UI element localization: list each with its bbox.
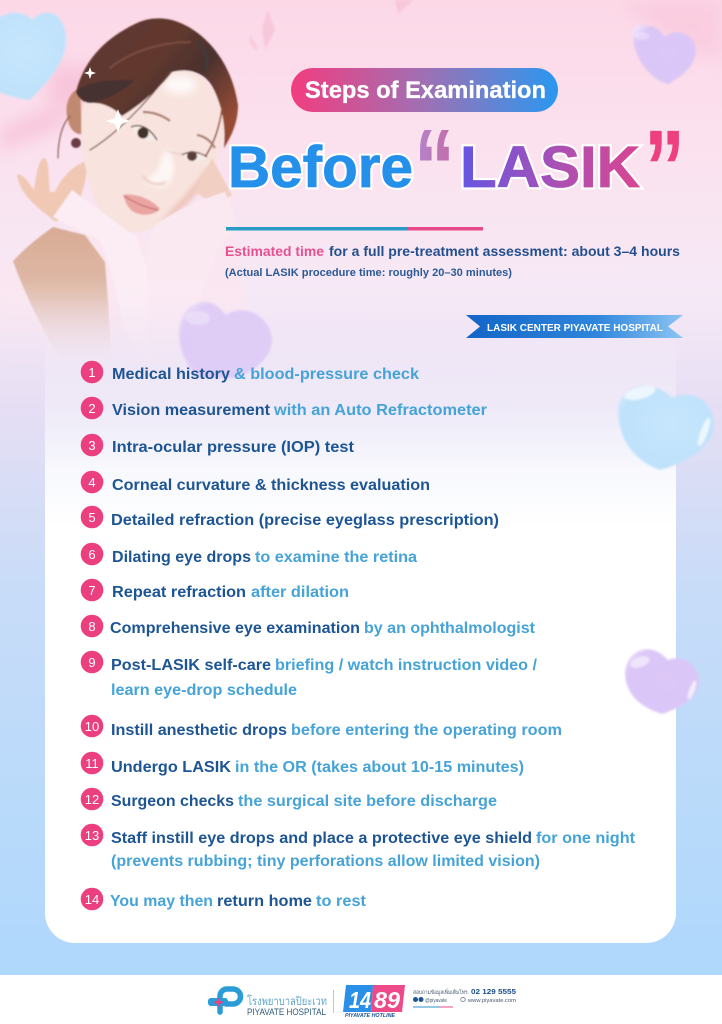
hotline 1489: 14 — [349, 987, 371, 1013]
footer separator — [333, 990, 334, 1013]
step 7: 7 — [88, 583, 96, 598]
title underline — [226, 227, 483, 230]
bun and ear — [66, 88, 82, 134]
footer — [0, 975, 722, 1024]
step 5 — [81, 506, 499, 529]
nose — [147, 150, 174, 188]
step 11: 11 — [85, 756, 99, 771]
left hand — [17, 158, 87, 222]
left eye — [131, 126, 157, 141]
sparkles — [84, 67, 96, 79]
step 1: 1 — [88, 365, 96, 380]
step 6 — [81, 543, 417, 566]
background blurred petals — [0, 0, 722, 150]
step 14: to rest — [316, 893, 366, 910]
hair strands — [58, 42, 222, 158]
step 7: Repeat refraction — [112, 584, 246, 601]
contact details: @piyavate — [425, 998, 447, 1004]
step 11: Undergo LASIK — [111, 759, 232, 776]
step 9: 9 — [88, 655, 96, 670]
hospital logo icon — [208, 989, 240, 1012]
title: Before LASIK: Before — [228, 135, 413, 200]
heart: middle lavender — [179, 302, 272, 378]
background paper fragments — [250, 0, 414, 50]
step 1: Medical history — [112, 366, 230, 383]
content card — [45, 320, 676, 943]
step 14: return home — [217, 893, 312, 910]
badge: Steps of Examination — [291, 68, 558, 112]
step 3: Intra-ocular pressure (IOP) test — [112, 439, 354, 456]
step 2: Vision measurement — [112, 402, 270, 419]
contact details — [413, 987, 516, 1008]
step 2 — [81, 397, 487, 419]
step 14: 14 — [85, 892, 99, 907]
lips — [123, 195, 160, 215]
title: Before LASIK: Before — [228, 135, 413, 200]
step 14 — [81, 888, 366, 910]
step 5: 5 — [88, 510, 96, 525]
step 10: before entering the operating room — [291, 722, 562, 739]
step 4 — [81, 471, 430, 494]
step 13: (prevents rubbing; tiny perforations allow limited vision) — [111, 853, 540, 870]
dark hair band — [76, 80, 135, 103]
step 8: 8 — [88, 619, 96, 634]
eyebrows — [143, 112, 170, 121]
blouse body — [0, 195, 255, 370]
left sleeve — [52, 190, 126, 231]
title: Before LASIK — [228, 106, 685, 228]
forehead highlight — [164, 76, 196, 94]
estimated time note: Estimated time — [225, 244, 325, 259]
step 7 — [81, 579, 349, 601]
step 11: in the OR (takes about 10-15 minutes) — [235, 759, 524, 776]
step 6: to examine the retina — [255, 549, 417, 566]
step 2: with an Auto Refractometer — [273, 402, 487, 419]
heart: top right lavender — [632, 25, 696, 84]
step 7: after dilation — [251, 584, 349, 601]
step 2: 2 — [88, 401, 96, 416]
estimated time note — [225, 244, 680, 279]
model portrait — [12, 17, 240, 346]
step 9 — [81, 651, 538, 699]
hospital name: PIYAVATE HOSPITAL — [247, 1007, 326, 1017]
step 1 — [81, 361, 419, 383]
step 13: for one night — [536, 830, 635, 847]
step 13: Staff instill eye drops and place a protective eye shield — [111, 830, 532, 847]
hospital name: โรงพยาบาลปิยะเวท — [247, 994, 327, 1008]
step 14: You may then — [110, 893, 213, 910]
neck and chest — [12, 226, 110, 344]
badge: Steps of Examination: Steps of Examination — [305, 77, 546, 104]
step 9: Post-LASIK self-care — [111, 657, 271, 674]
step 3 — [81, 434, 354, 456]
step 6: 6 — [88, 547, 96, 562]
step 12 — [81, 788, 497, 810]
step 12: the surgical site before discharge — [238, 793, 497, 810]
step 10: 10 — [85, 719, 99, 734]
step 4: 4 — [88, 475, 96, 490]
step 9: briefing / watch instruction video / — [275, 657, 538, 674]
right hand near temple — [196, 158, 232, 199]
step 8: Comprehensive eye examination — [110, 620, 360, 637]
right eye — [182, 151, 207, 161]
step 12: Surgeon checks — [111, 793, 234, 810]
step 6: Dilating eye drops — [112, 549, 251, 566]
heart: lower right lavender — [625, 649, 699, 714]
step 9: learn eye-drop schedule — [111, 682, 297, 699]
heart: top left blue — [0, 13, 66, 100]
contact details: 02 129 5555 — [471, 987, 516, 996]
contact details: www.piyavate.com — [468, 998, 516, 1004]
step 5: Detailed refraction (precise eyeglass prescription) — [111, 512, 499, 529]
ribbon: LASIK Center — [466, 315, 683, 338]
estimated time note: (Actual LASIK procedure time: roughly 20–30 minutes) — [225, 267, 512, 279]
title: Before LASIK: ” — [644, 107, 685, 228]
hospital name — [247, 994, 327, 1017]
step 3: 3 — [88, 438, 96, 453]
step 4: Corneal curvature & thickness evaluation — [112, 477, 430, 494]
face — [81, 64, 225, 232]
estimated time note: for a full pre-treatment assessment: about 3–4 hours — [329, 244, 680, 259]
step 10 — [81, 715, 562, 739]
title: Before LASIK: LASIK — [460, 135, 640, 200]
ribbon: LASIK Center: LASIK CENTER PIYAVATE HOSPITAL — [487, 323, 663, 334]
hotline 1489: 89 — [374, 987, 400, 1013]
step 12: 12 — [85, 792, 99, 807]
heart: right blue — [618, 383, 714, 470]
step 13: 13 — [85, 828, 99, 843]
glasses frame — [166, 150, 184, 154]
right sleeve — [156, 192, 228, 226]
step 8: by an ophthalmologist — [364, 620, 535, 637]
title: Before LASIK: LASIK — [460, 135, 640, 200]
hotline 1489: PIYAVATE HOTLINE — [345, 1013, 395, 1019]
part shadow — [198, 42, 207, 70]
cheek shading — [163, 168, 206, 219]
hair — [76, 18, 238, 148]
step 13 — [81, 824, 635, 870]
title: Before LASIK: “ — [414, 106, 455, 227]
step 1: & blood-pressure check — [234, 366, 419, 383]
step 11 — [81, 752, 524, 776]
contact details: สอบถามข้อมูลเพิ่มเติมโทร. — [413, 988, 469, 996]
step 8 — [81, 615, 535, 637]
step 10: Instill anesthetic drops — [111, 722, 287, 739]
hotline 1489 — [343, 985, 405, 1019]
